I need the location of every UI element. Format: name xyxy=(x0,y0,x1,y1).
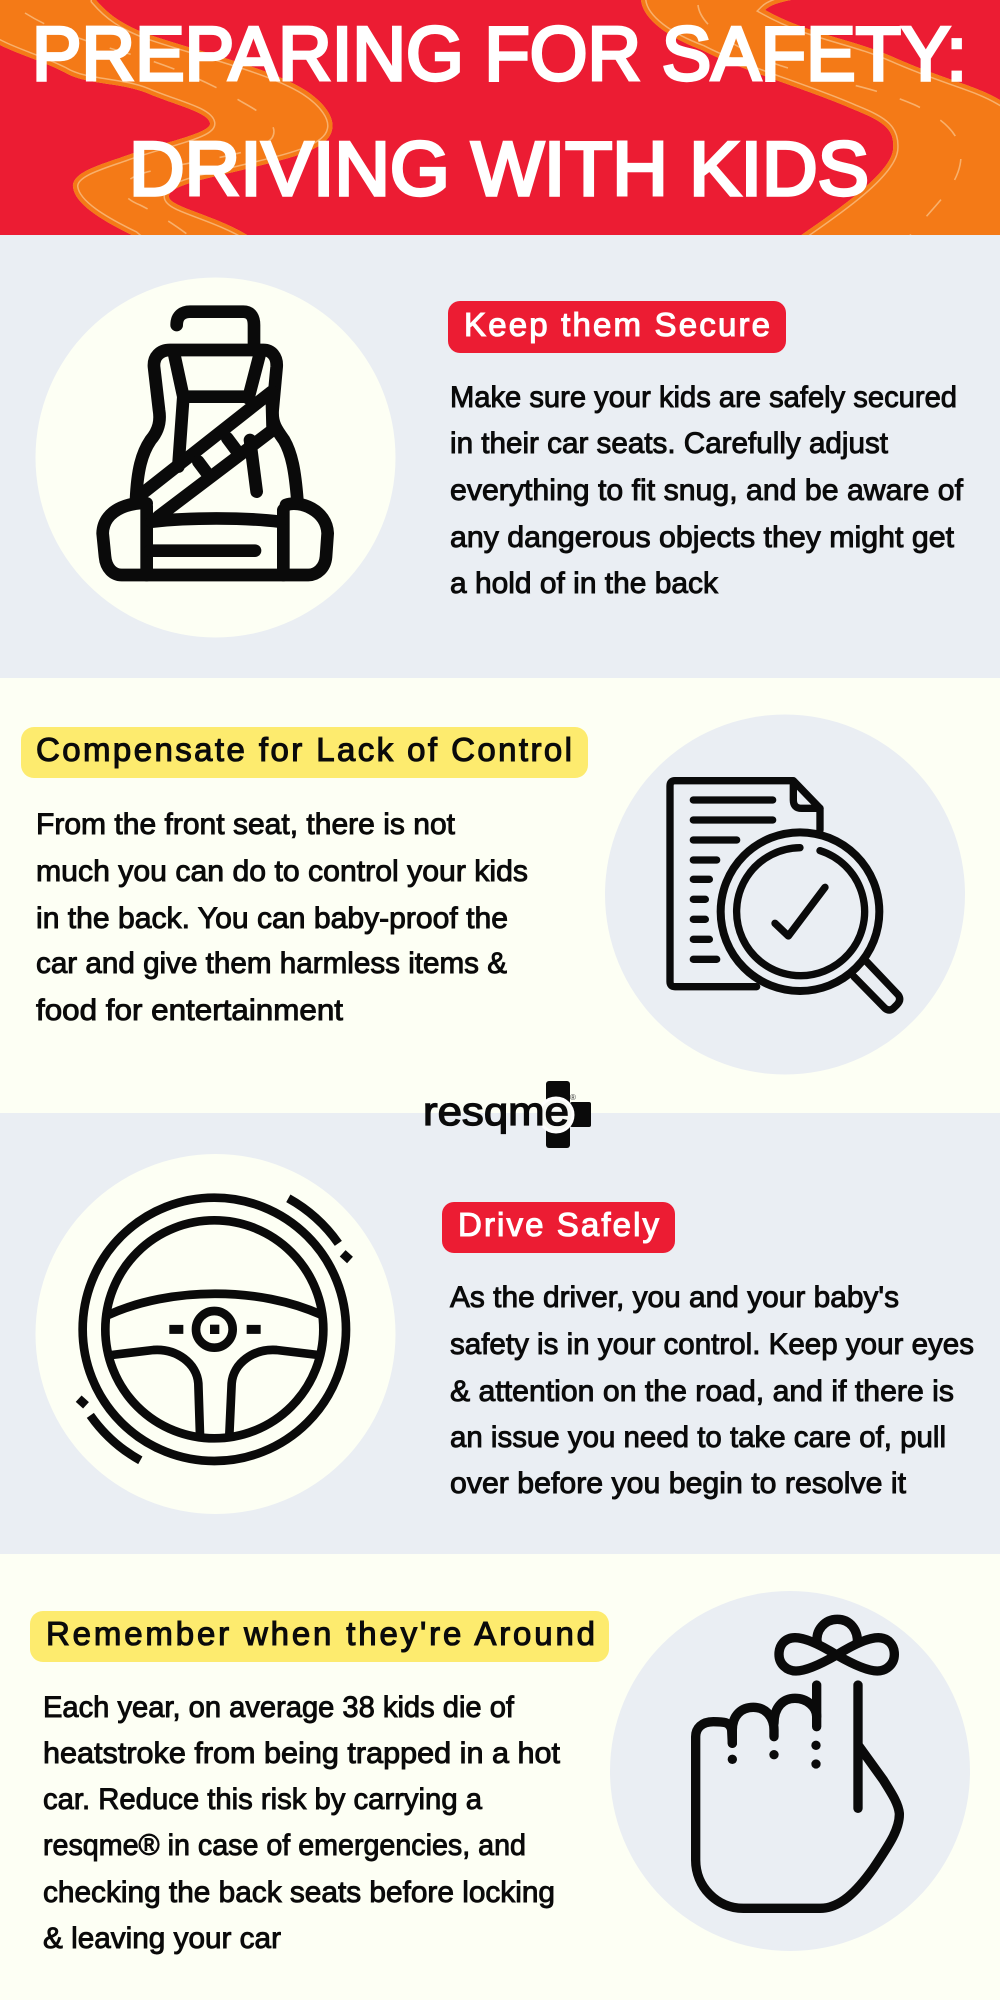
text: compensate for lack of control: food for entertainment xyxy=(36,994,344,1027)
text: keep them secure: a hold of in the back xyxy=(450,567,719,600)
panel: keep them secure xyxy=(0,235,1000,678)
text: compensate for lack of control: car and give them harmless items & xyxy=(36,947,507,980)
logo: resqme: resqme xyxy=(423,1090,569,1134)
text: keep them secure: everything to fit snug, and be aware of xyxy=(450,474,964,507)
title: PREPARING FOR SAFETY: xyxy=(32,12,967,97)
heading: drive safely: Drive Safely xyxy=(458,1206,660,1243)
panel: remember when they're around xyxy=(0,1554,1000,2000)
heading: keep them secure xyxy=(448,301,786,353)
text: keep them secure: in their car seats. Carefully adjust xyxy=(450,427,889,460)
text: drive safely: an issue you need to take care of, pull xyxy=(450,1421,946,1454)
logo: resqme xyxy=(423,1081,591,1148)
text: remember when they're around: & leaving your car xyxy=(43,1922,281,1955)
text: remember when they're around xyxy=(43,1691,561,1955)
text: drive safely: safety is in your control. Keep your eyes xyxy=(450,1328,974,1361)
icon: car seat in circle xyxy=(36,278,396,638)
title: DRIVING WITH KIDS xyxy=(129,127,869,212)
panel: drive safely xyxy=(0,1113,1000,1554)
text: drive safely: over before you begin to resolve it xyxy=(450,1467,907,1500)
heading: remember when they're around xyxy=(30,1611,609,1662)
logo: resqme: ® xyxy=(570,1093,576,1102)
heading: keep them secure: Keep them Secure xyxy=(464,306,770,343)
text: remember when they're around: Each year, on average 38 kids die of xyxy=(43,1691,515,1724)
text: compensate for lack of control: much you can do to control your kids xyxy=(36,855,528,888)
text: keep them secure xyxy=(450,381,964,600)
text: drive safely xyxy=(450,1281,974,1500)
text: remember when they're around: car. Reduce this risk by carrying a xyxy=(43,1783,482,1816)
heading: compensate for lack of control: Compensate for Lack of Control xyxy=(36,731,572,768)
text: compensate for lack of control xyxy=(36,808,528,1027)
panel: compensate for lack of control xyxy=(0,678,1000,1113)
text: remember when they're around: heatstroke from being trapped in a hot xyxy=(43,1737,561,1770)
text: drive safely: & attention on the road, and if there is xyxy=(450,1375,954,1408)
text: drive safely: As the driver, you and your baby's xyxy=(450,1281,899,1314)
text: compensate for lack of control: in the back. You can baby-proof the xyxy=(36,902,508,935)
road: left xyxy=(0,0,333,258)
text: remember when they're around: resqme® in case of emergencies, and xyxy=(43,1829,526,1862)
text: keep them secure: any dangerous objects they might get xyxy=(450,521,955,554)
icon: finger with ribbon in circle xyxy=(610,1591,970,1951)
title xyxy=(32,12,967,212)
icon: steering wheel in circle xyxy=(36,1154,396,1514)
text: remember when they're around: checking the back seats before locking xyxy=(43,1876,555,1909)
heading: drive safely xyxy=(442,1202,675,1253)
text: keep them secure: Make sure your kids are safely secured xyxy=(450,381,957,414)
text: compensate for lack of control: From the front seat, there is not xyxy=(36,808,456,841)
header banner xyxy=(0,0,1000,258)
heading: compensate for lack of control xyxy=(21,727,588,778)
icon: document and magnifier in circle xyxy=(605,714,965,1074)
road: right xyxy=(641,0,1000,258)
heading: remember when they're around: Remember when they're Around xyxy=(46,1615,595,1652)
